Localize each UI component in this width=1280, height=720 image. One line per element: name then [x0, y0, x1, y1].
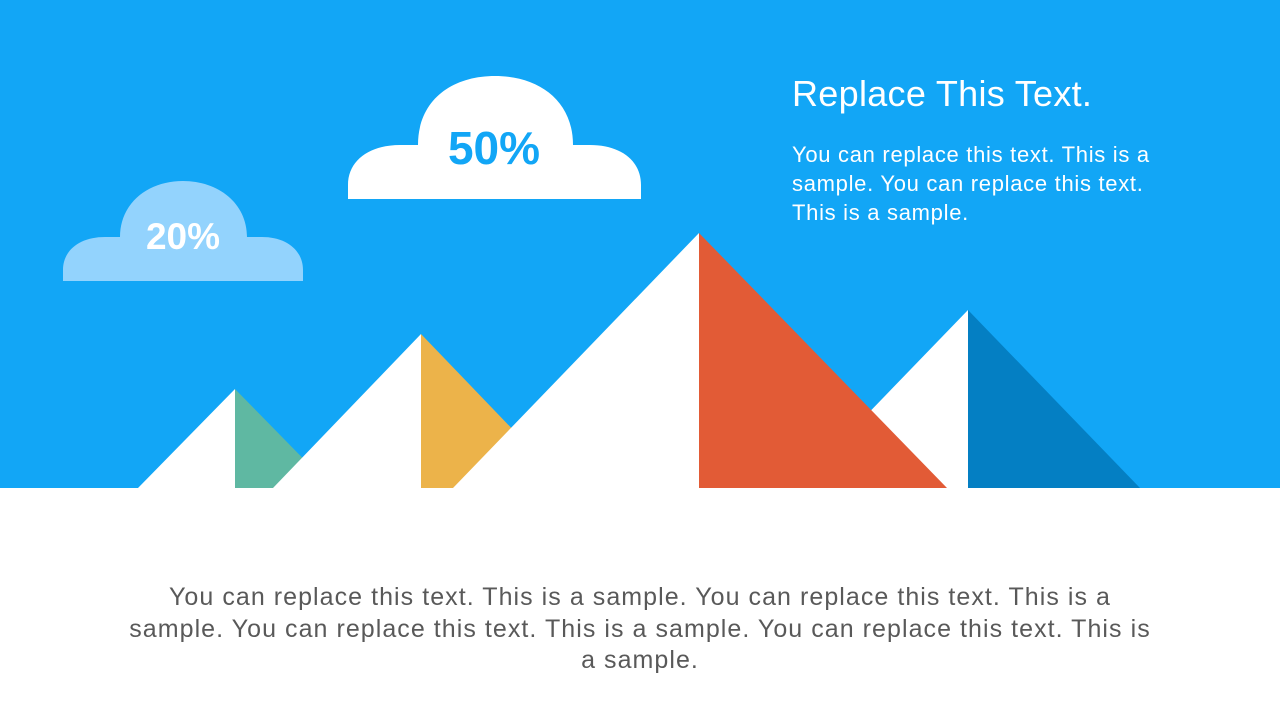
- text block: bottom: You can replace this text. This is a sample. You can replace this text. This is a sample. You can replace this text. This is a sample. You can replace this text. This is a sample.: [129, 583, 1151, 674]
- mountain 4 (dark blue): [796, 310, 1140, 488]
- text block: top right: You can replace this text. This is a sample. You can replace this text. This is a sample.: [792, 142, 1150, 225]
- mountain 1 (teal): [138, 389, 332, 488]
- cloud: 20%: [63, 181, 303, 281]
- cloud: 50%: 50%: [448, 122, 540, 174]
- sky background: [0, 0, 1280, 488]
- cloud: 50%: [348, 76, 641, 199]
- cloud: 20%: 20%: [146, 216, 220, 257]
- mountain 2 (yellow): [273, 334, 569, 488]
- mountain 3 (orange): [453, 233, 947, 488]
- heading: Replace This Text.: [792, 73, 1092, 114]
